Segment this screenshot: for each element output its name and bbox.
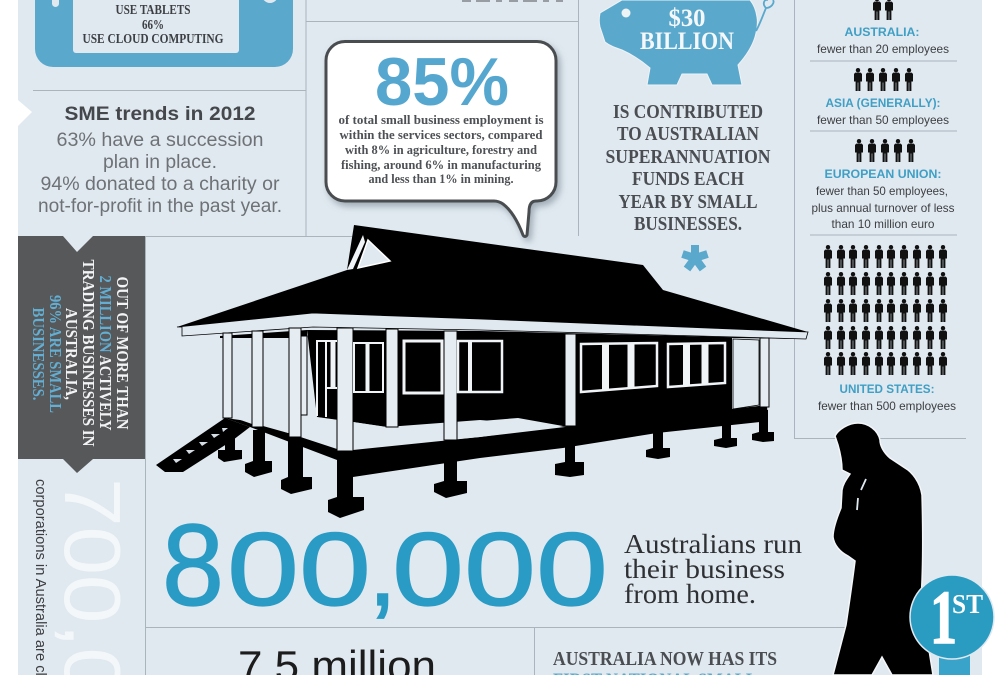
panel: dark banner with 2 million businesses: 96% ARE SMALL [46,295,65,413]
bubble body text: fishing, around 6% in manufacturing [341,157,541,172]
rotated figure: 700,000 corporations: 700,0 [48,478,137,675]
panel: SME definitions by region [810,0,957,413]
figure: 800,000: 00 [227,512,371,628]
text block: SME trends in 2012: 94% donated to a charity or [40,174,280,195]
icon: piggy bank with $30 billion [599,0,774,85]
EU definition: EUROPEAN UNION: [824,167,942,181]
text block: superannuation contribution: SUPERANNUATION [606,146,771,168]
text block: SME trends in 2012: not-for-profit in the past year. [38,196,282,217]
US definition [818,382,956,413]
text block: SME trends in 2012: plan in place. [103,152,217,173]
text block: Australians run their business from home: Australians run [624,529,803,559]
figure: 800,000 [162,500,608,630]
dormer [347,235,365,270]
panel: dark banner with 2 million businesses: BUSINESSES. [29,308,48,400]
bubble body text: within the services sectors, compared [340,127,543,142]
icon: US people grid [824,245,947,375]
text block: SME trends in 2012: 63% have a succession [56,130,264,151]
tablet text: USE CLOUD COMPUTING [82,31,224,46]
badge: 1st ribbon: ST [952,589,983,619]
heading: Australia now has its: AUSTRALIA NOW HAS ITS [553,648,777,670]
posts [223,328,769,451]
badge: 1st ribbon: 1 [930,576,957,660]
icon: house on stilts [156,225,808,518]
panel: dark banner with 2 million businesses: 2 MILLION ACTIVELY [96,276,115,430]
text block: superannuation contribution: IS CONTRIBUTED [613,101,763,123]
EU definition: than 10 million euro [832,217,935,231]
icon: man silhouette [833,423,933,675]
right porch opening [733,339,759,409]
icon: Australia people [873,0,893,20]
text block: superannuation contribution: FUNDS EACH [632,168,744,190]
deck beam [225,406,768,477]
figure: 800,000: 000 [392,512,608,628]
icon: Asia people [854,68,913,91]
EU definition: plus annual turnover of less [812,201,954,215]
text block: Australians run their business from home [624,529,803,609]
icon: piggy bank with $30 billion: $30 [668,5,706,32]
panel: dark banner with 2 million businesses: TRADING BUSINESSES IN [79,260,98,447]
figure: 800,000: 8 [162,500,224,630]
text block: Australians run their business from home: their business [624,554,785,584]
85% figure: 85% [375,44,509,120]
stairs [156,418,250,472]
windows [317,340,725,417]
EU definition [812,167,954,231]
Australia definition: fewer than 20 employees [817,42,949,56]
tablet text [82,2,224,46]
tablet text: USE TABLETS [116,2,190,17]
icon: blue asterisk [682,245,708,269]
Asia definition: fewer than 50 employees [817,113,949,127]
badge: 1st ribbon [910,575,994,675]
bubble body text: and less than 1% in mining. [368,171,514,186]
text block: superannuation contribution [606,101,771,235]
text block: SME trends in 2012: SME trends in 2012 [64,104,256,125]
icon: EU people [855,139,915,162]
bubble body text: of total small business employment is [338,112,544,127]
panel: dark banner with 2 million businesses [18,236,145,473]
Asia definition: ASIA (GENERALLY): [826,96,940,110]
wall [307,330,806,427]
icon: tablet with usage statistics [35,0,293,67]
panel: dark banner with 2 million businesses: AUSTRALIA, [62,308,81,400]
text block: Australians run their business from home: from home. [624,579,756,609]
panel: dark banner with 2 million businesses: OUT OF MORE THAN [113,276,132,430]
fascia [177,313,808,339]
bubble body text [338,112,544,186]
text block: superannuation contribution: YEAR BY SMALL [618,191,758,213]
Australia definition: AUSTRALIA: [844,25,920,39]
Australia definition [817,25,949,56]
text block: superannuation contribution: TO AUSTRALIAN [617,123,759,145]
US definition: fewer than 500 employees [818,399,956,413]
bubble body text: with 8% in agriculture, forestry and [345,142,538,157]
text block: superannuation contribution: BUSINESSES. [634,213,742,235]
icon: piggy bank with $30 billion: BILLION [640,28,734,55]
roof [177,225,808,332]
icon: white side notch [18,100,32,126]
tablet text: 66% [142,17,164,32]
footings [218,410,774,518]
porch floor [353,418,563,450]
text block: SME trends in 2012 [38,104,282,217]
figure: 800,000: , [368,512,397,628]
US definition: UNITED STATES: [840,382,934,396]
callout: 85% speech bubble [326,42,556,236]
Asia definition [817,96,949,127]
EU definition: fewer than 50 employees, [816,184,948,198]
